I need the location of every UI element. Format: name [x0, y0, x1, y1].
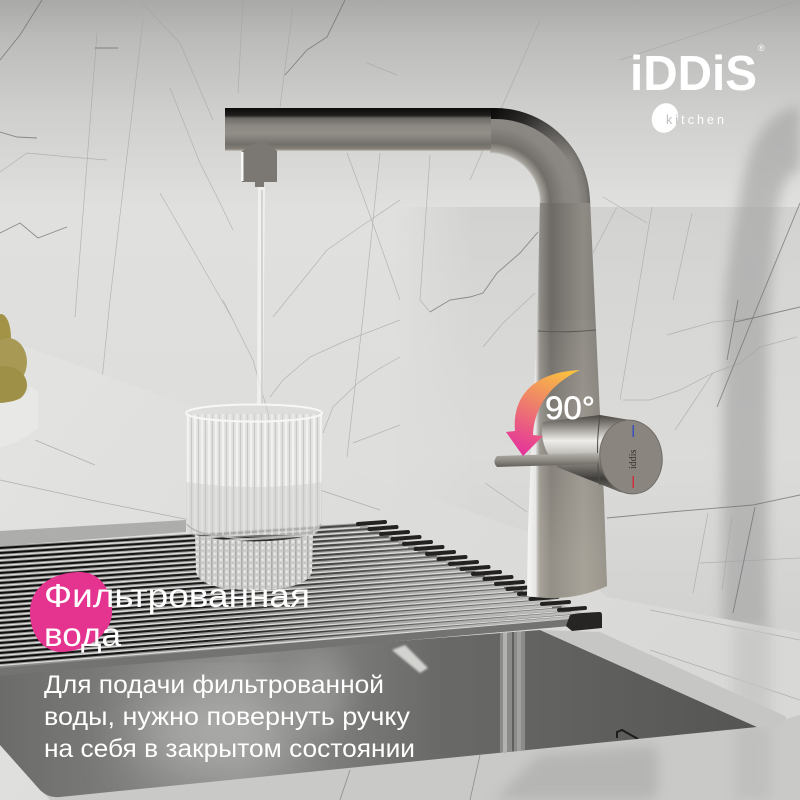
faucet elbow	[490, 108, 590, 203]
pears	[0, 314, 11, 362]
heading	[44, 577, 310, 653]
glass upper section	[186, 414, 322, 535]
rotation arrow	[506, 370, 580, 456]
rotation label: 90°	[545, 390, 595, 426]
glass base	[195, 535, 313, 590]
water in glass	[186, 482, 322, 537]
body warm lower tone	[538, 320, 607, 599]
rod end caps	[358, 522, 585, 610]
faucet spout	[225, 108, 491, 151]
pink accent blob	[30, 572, 112, 652]
heading: вода	[44, 616, 122, 653]
marble wall background	[0, 0, 800, 627]
window shadow on wall	[722, 106, 800, 640]
aerator	[242, 142, 277, 187]
faucet body	[527, 198, 607, 598]
marble veins faint	[0, 0, 800, 593]
handle	[494, 415, 668, 499]
sink basin	[0, 630, 756, 798]
body joint line	[538, 330, 596, 332]
drying rack with rods	[0, 522, 602, 676]
handle collar	[598, 416, 600, 485]
ribbed glass	[186, 404, 322, 590]
water stream	[257, 187, 265, 405]
counter front strip	[0, 520, 186, 546]
faucet elbow dark top band	[490, 108, 577, 161]
rack clip	[566, 612, 602, 631]
front counter reflection	[495, 745, 658, 800]
logo: iDDiS	[630, 47, 757, 101]
handle brand: iddis	[628, 449, 639, 469]
logo	[630, 43, 765, 137]
counter rim	[541, 630, 786, 727]
front counter	[0, 715, 800, 800]
counter streaks	[0, 440, 800, 700]
glass rim	[186, 404, 322, 422]
bowl	[0, 386, 38, 447]
logo: ®	[758, 43, 765, 53]
marble veins dark	[0, 0, 800, 613]
aerator highlight	[241, 152, 244, 181]
handle cylinder	[542, 415, 630, 493]
description text	[44, 671, 415, 763]
handle lever	[494, 453, 598, 467]
countertop	[0, 338, 800, 800]
fruit bowl	[0, 314, 38, 447]
description text: на себя в закрытом состоянии	[44, 735, 415, 763]
logo: kitchen	[666, 113, 724, 127]
wall reflection on right counter	[733, 625, 771, 730]
heading: Фильтрованная	[44, 577, 310, 614]
blue mark	[632, 425, 634, 437]
faucet	[225, 108, 607, 599]
shaded lower wall	[439, 207, 800, 633]
red mark	[632, 476, 634, 488]
stream reflection	[500, 630, 525, 755]
drain clip	[617, 730, 638, 739]
description text: Для подачи фильтрованной	[44, 671, 384, 699]
description text: воды, нужно повернуть ручку	[44, 703, 411, 731]
handle end face	[594, 415, 668, 499]
